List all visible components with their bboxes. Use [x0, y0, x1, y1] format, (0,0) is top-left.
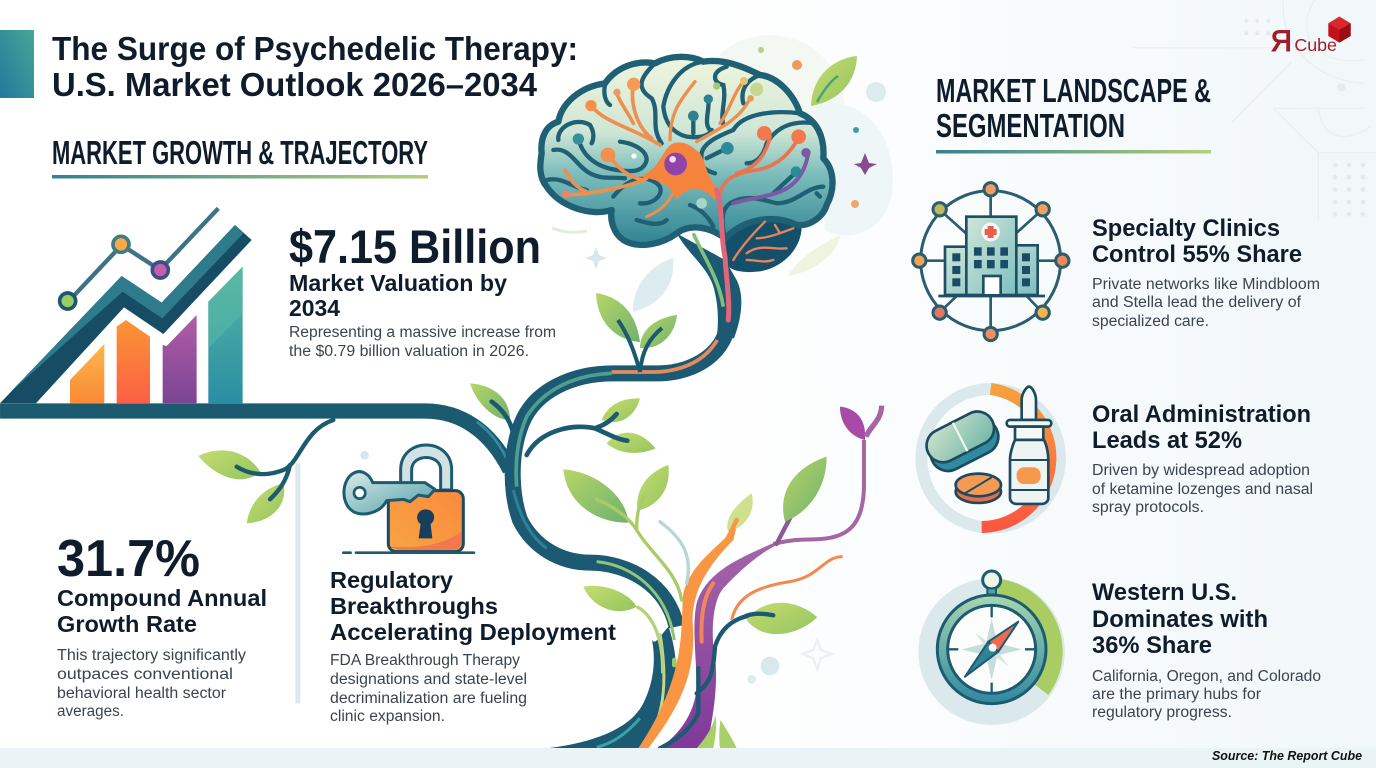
brain folds	[547, 62, 823, 238]
segment: oral administration: Oral Administration	[1092, 401, 1311, 428]
stat: regulatory breakthroughs: clinic expansion.	[330, 708, 445, 725]
heading: market landscape and segmentation: SEGMENTATION	[936, 107, 1125, 144]
stat: regulatory breakthroughs: FDA Breakthrough Therapy	[330, 652, 520, 669]
heading: market growth and trajectory: MARKET GROWTH & TRAJECTORY	[52, 134, 428, 171]
segment: oral administration: Leads at 52%	[1092, 427, 1242, 454]
right leaves	[727, 457, 827, 634]
segment: western US: regulatory progress.	[1092, 704, 1232, 721]
heading: market landscape and segmentation: MARKET LANDSCAPE &	[936, 72, 1211, 109]
title	[52, 30, 578, 103]
stat: market valuation: Representing a massive increase from	[289, 324, 556, 341]
stat: market valuation: 2034	[289, 295, 340, 321]
segment: oral administration: of ketamine lozenges and nasal	[1092, 481, 1313, 498]
brain illustration	[540, 57, 833, 338]
stat: CAGR: Compound Annual	[57, 585, 267, 611]
stat: CAGR	[57, 530, 267, 720]
trunk base	[547, 627, 676, 748]
brain body	[540, 57, 833, 245]
icon: hospital network	[913, 183, 1069, 341]
dark inner vine	[660, 614, 773, 748]
segment: specialty clinics: and Stella lead the delivery of	[1092, 294, 1302, 311]
stat: regulatory breakthroughs: Accelerating Deployment	[330, 619, 616, 645]
central neuron	[640, 143, 720, 200]
segment: western US: California, Oregon, and Colorado	[1092, 668, 1321, 685]
segment: specialty clinics: Private networks like Mindbloom	[1092, 276, 1320, 293]
thin orange vine	[732, 557, 843, 620]
footer strip	[0, 748, 1376, 768]
title accent tab	[0, 30, 34, 98]
left horizontal branch	[0, 411, 510, 470]
orange stem	[638, 520, 738, 748]
blobs behind brain	[552, 35, 893, 312]
stat: CAGR: Growth Rate	[57, 611, 197, 637]
leaf cluster above branch	[596, 293, 677, 372]
leaf: top right of brain	[811, 56, 857, 106]
stat: regulatory breakthroughs	[330, 567, 616, 725]
synapse nodes	[562, 77, 811, 209]
decorative sparkle and dots	[747, 640, 832, 684]
segment: oral administration	[1092, 401, 1313, 516]
stat: CAGR: 31.7%	[57, 530, 200, 588]
orange accent	[701, 583, 713, 642]
main trunk	[513, 317, 728, 627]
icon: growth chart	[0, 208, 252, 403]
segment: specialty clinics: specialized care.	[1092, 313, 1209, 330]
stat: regulatory breakthroughs: designations and state-level	[330, 671, 527, 688]
stat: regulatory breakthroughs: decriminalization are fueling	[330, 690, 527, 707]
footer strip: Source: The Report Cube	[1212, 749, 1362, 763]
segment: western US	[1092, 579, 1321, 721]
icon: key and padlock	[343, 445, 474, 553]
stat: market valuation: Market Valuation by	[289, 270, 507, 296]
segment: specialty clinics: Specialty Clinics	[1092, 215, 1280, 242]
purple sprout	[840, 407, 865, 440]
trunk nerves	[717, 137, 808, 320]
stat: CAGR: averages.	[57, 703, 124, 720]
stem into brain	[677, 233, 741, 338]
stat: market valuation	[289, 220, 556, 360]
heading: market growth and trajectory	[52, 134, 428, 178]
branch to lower left leaves	[198, 420, 369, 703]
lower green leaves	[563, 465, 737, 748]
upper leaves	[470, 383, 656, 455]
segment: oral administration: Driven by widespread adoption	[1092, 462, 1310, 479]
stat: regulatory breakthroughs: Breakthroughs	[330, 593, 498, 619]
logo: RCube: Cube	[1294, 35, 1337, 55]
icon: pills and nasal spray	[921, 387, 1060, 528]
segment: western US: are the primary hubs for	[1092, 686, 1261, 703]
segment: specialty clinics	[1092, 215, 1320, 330]
heading: market landscape and segmentation	[936, 72, 1211, 154]
stat: market valuation: the $0.79 billion valuation in 2026.	[289, 343, 529, 360]
stat: market valuation: $7.15 Billion	[289, 220, 541, 273]
segment: oral administration: spray protocols.	[1092, 499, 1204, 516]
segment: western US: Western U.S.	[1092, 579, 1237, 606]
segment: specialty clinics: Control 55% Share	[1092, 241, 1302, 268]
stat: CAGR: behavioral health sector	[57, 685, 226, 702]
neural branches	[565, 82, 750, 217]
title: The Surge of Psychedelic Therapy:	[52, 30, 578, 67]
stat: regulatory breakthroughs: Regulatory	[330, 567, 453, 593]
stat: CAGR: This trajectory significantly	[57, 647, 246, 664]
tree: trunk, branches and leaves	[0, 317, 882, 748]
icon: compass	[918, 571, 1065, 725]
logo: RCube: Я	[1271, 25, 1292, 58]
decorative circuit pattern	[1133, 0, 1376, 220]
stat: CAGR: outpaces conventional	[57, 666, 233, 683]
logo: RCube	[1271, 17, 1351, 58]
cerebellum	[723, 218, 802, 272]
purple stem	[660, 542, 777, 748]
title: U.S. Market Outlook 2026–2034	[52, 66, 538, 103]
segment: western US: 36% Share	[1092, 632, 1212, 659]
segment: western US: Dominates with	[1092, 606, 1268, 633]
